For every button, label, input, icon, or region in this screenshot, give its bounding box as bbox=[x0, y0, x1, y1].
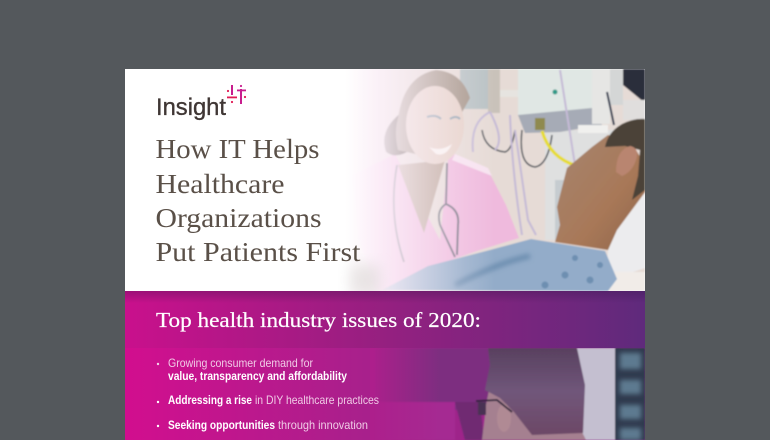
bullet 1: Growing consumer demand for bbox=[168, 356, 313, 370]
photo: nurse and patient bbox=[380, 69, 645, 291]
man hair bbox=[485, 348, 585, 435]
logo wordmark: Insight bbox=[156, 94, 226, 121]
nurse hair bbox=[396, 70, 470, 155]
heading: Top health industry issues of 2020: bbox=[156, 308, 481, 332]
photo: man at monitor bbox=[375, 348, 645, 440]
panel: issues body bbox=[125, 348, 645, 440]
stethoscope bbox=[394, 163, 458, 262]
patient head bbox=[555, 135, 645, 250]
bullet 3: Seeking opportunities bbox=[168, 418, 275, 432]
infographic page bbox=[125, 69, 645, 440]
nurse neck bbox=[398, 160, 445, 233]
title: Put Patients First bbox=[156, 237, 361, 267]
title bbox=[156, 134, 361, 267]
patient ear bbox=[616, 146, 637, 176]
nurse scrubs bbox=[394, 156, 519, 281]
bullet 1 bbox=[157, 356, 347, 383]
bullet 2: in DIY healthcare practices bbox=[255, 393, 379, 407]
bullet 1: value, transparency and affordability bbox=[168, 369, 347, 383]
patient hair bbox=[605, 119, 645, 200]
title: Healthcare bbox=[156, 169, 285, 199]
title: How IT Helps bbox=[156, 134, 320, 164]
panel: header with photo bbox=[125, 69, 645, 295]
white fade overlay bbox=[345, 69, 495, 291]
bottom grey patch bbox=[350, 265, 380, 295]
patient pillow bbox=[607, 193, 645, 277]
bullet 3 bbox=[157, 418, 368, 432]
patient gown bbox=[382, 239, 617, 291]
nurse face bbox=[406, 86, 464, 164]
bullet 3: through innovation bbox=[278, 418, 368, 432]
magenta fade overlay bbox=[374, 348, 428, 440]
man neck and ear bbox=[481, 392, 586, 440]
bullet 2: Addressing a rise bbox=[168, 393, 252, 407]
logo: Insight bbox=[156, 85, 246, 121]
title: Organizations bbox=[156, 203, 322, 233]
bullet 2 bbox=[157, 393, 379, 407]
nurse bun bbox=[384, 116, 406, 156]
bullet list bbox=[157, 356, 379, 432]
icon: logo hash bbox=[227, 85, 246, 104]
panel: heading band bbox=[125, 291, 645, 348]
glasses bbox=[476, 400, 512, 412]
